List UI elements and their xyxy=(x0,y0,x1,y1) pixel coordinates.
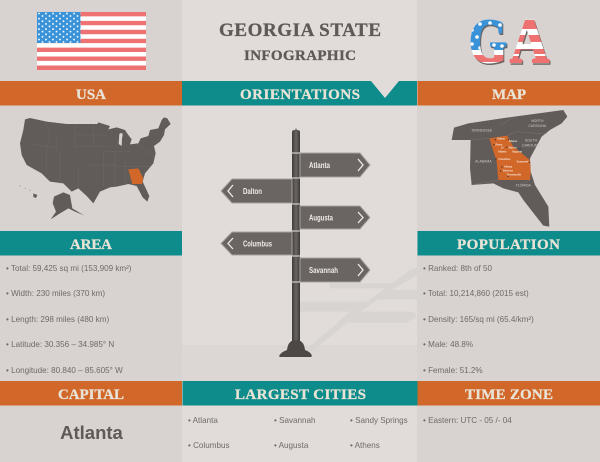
map: Georgia and neighbouring states: Columbus xyxy=(498,158,511,161)
signpost xyxy=(221,128,370,357)
heading bar: capital: CAPITAL xyxy=(58,387,124,403)
map: Georgia and neighbouring states xyxy=(452,110,567,227)
heading bar: map xyxy=(418,81,600,106)
icon: GA flag lettering: G xyxy=(470,10,508,78)
title: INFOGRAPHIC xyxy=(244,48,356,64)
sign: Atlanta xyxy=(300,153,370,177)
heading bar: orientations: ORIENTATIONS xyxy=(240,87,360,103)
icon: GA flag lettering xyxy=(469,8,550,78)
sign: Augusta xyxy=(300,206,370,229)
capital name: Atlanta xyxy=(60,422,124,443)
map: Georgia and neighbouring states: Thomasville xyxy=(507,174,522,177)
list: population facts: • Density: 165/sq mi (65.4/km²) xyxy=(423,315,534,324)
icon: US flag xyxy=(37,12,146,70)
list: area facts: • Longitude: 80.840 – 85.605° W xyxy=(6,366,123,375)
list: largest cities: • Savannah xyxy=(274,416,316,425)
panel: center lower band xyxy=(182,345,417,381)
title xyxy=(219,20,381,64)
list: area facts: • Width: 230 miles (370 km) xyxy=(6,289,105,298)
map: Georgia and neighbouring states: Atlanta xyxy=(498,150,507,153)
map: United States xyxy=(19,117,171,219)
map: Georgia and neighbouring states: Rome xyxy=(495,144,503,147)
list: largest cities: • Augusta xyxy=(274,441,309,450)
list: area facts xyxy=(6,264,132,375)
heading bar: area: AREA xyxy=(70,237,112,253)
heading bar: USA xyxy=(0,81,182,106)
heading bar: largest cities xyxy=(182,381,418,406)
map: Georgia and neighbouring states: CAROLINA xyxy=(528,124,547,128)
list: largest cities: • Atlanta xyxy=(188,416,218,425)
list: area facts: • Total: 59,425 sq mi (153,909 km²) xyxy=(6,264,132,273)
heading bar: largest cities: LARGEST CITIES xyxy=(235,387,366,403)
sign: Dalton xyxy=(221,179,292,203)
map: Georgia and neighbouring states: SOUTH xyxy=(525,138,538,142)
sign: Columbus xyxy=(221,232,292,255)
heading bar: time zone: TIME ZONE xyxy=(465,387,553,403)
heading bar: USA: USA xyxy=(76,87,106,103)
list: population facts: • Total: 10,214,860 (2015 est) xyxy=(423,289,529,298)
map: Georgia and neighbouring states: ALABAMA xyxy=(475,159,492,163)
heading bar: capital xyxy=(0,381,182,406)
list: largest cities: • Athens xyxy=(350,441,380,450)
signpost shadows xyxy=(300,267,420,352)
icon: GA flag lettering: A xyxy=(511,10,550,78)
heading bar: map: MAP xyxy=(492,87,526,103)
map: Georgia and neighbouring states: Athens xyxy=(509,140,518,143)
heading bar: area xyxy=(0,231,182,256)
panel: center column background xyxy=(182,0,417,462)
list: area facts: • Length: 298 miles (480 km) xyxy=(6,315,109,324)
map: Georgia and neighbouring states: CAROLINA xyxy=(522,143,541,147)
list: largest cities: • Sandy Springs xyxy=(350,416,408,425)
title: GEORGIA STATE xyxy=(219,20,381,41)
heading bar: time zone xyxy=(418,381,600,406)
map: Georgia and neighbouring states: Savannah xyxy=(517,161,529,164)
heading bar: population xyxy=(418,231,600,256)
sign: Savannah xyxy=(300,258,370,282)
list: population facts: • Ranked: 8th of 50 xyxy=(423,264,492,273)
panel: right column background xyxy=(417,0,600,462)
map: Georgia and neighbouring states: NORTH xyxy=(531,119,544,123)
list: population facts: • Female: 51.2% xyxy=(423,366,483,375)
list: largest cities xyxy=(188,416,408,450)
list: population facts: • Male: 48.8% xyxy=(423,340,473,349)
map: Georgia and neighbouring states: Dalton xyxy=(497,138,506,141)
heading bar: population: POPULATION xyxy=(457,237,560,253)
map: Georgia and neighbouring states: TENNESSEE xyxy=(471,128,493,132)
map: Georgia and neighbouring states: FLORIDA xyxy=(516,184,532,188)
map: Georgia and neighbouring states: Albany xyxy=(504,166,513,169)
list: largest cities: • Columbus xyxy=(188,441,230,450)
list: area facts: • Latitude: 30.356 – 34.985° N xyxy=(6,340,114,349)
sign: Dalton: Dalton xyxy=(243,187,262,196)
icon: GA flag lettering: A xyxy=(510,8,549,76)
time zone text: • Eastern: UTC - 05 /- 04 xyxy=(423,416,512,425)
pole base xyxy=(279,340,312,357)
list: population facts xyxy=(423,264,534,375)
map: Georgia and neighbouring states: Valdosta xyxy=(503,170,514,173)
map: Georgia and neighbouring states: Augusta xyxy=(512,150,523,153)
sign: Atlanta: Atlanta xyxy=(309,161,330,170)
pole xyxy=(292,128,300,342)
sign: Augusta: Augusta xyxy=(309,214,333,222)
map: Georgia and neighbouring states: Macon xyxy=(509,146,517,149)
panel: left column background xyxy=(0,0,182,462)
heading bar: orientations xyxy=(182,81,417,106)
sign: Savannah: Savannah xyxy=(309,266,338,275)
icon: GA flag lettering: G xyxy=(469,8,507,76)
sign: Columbus: Columbus xyxy=(243,240,272,248)
